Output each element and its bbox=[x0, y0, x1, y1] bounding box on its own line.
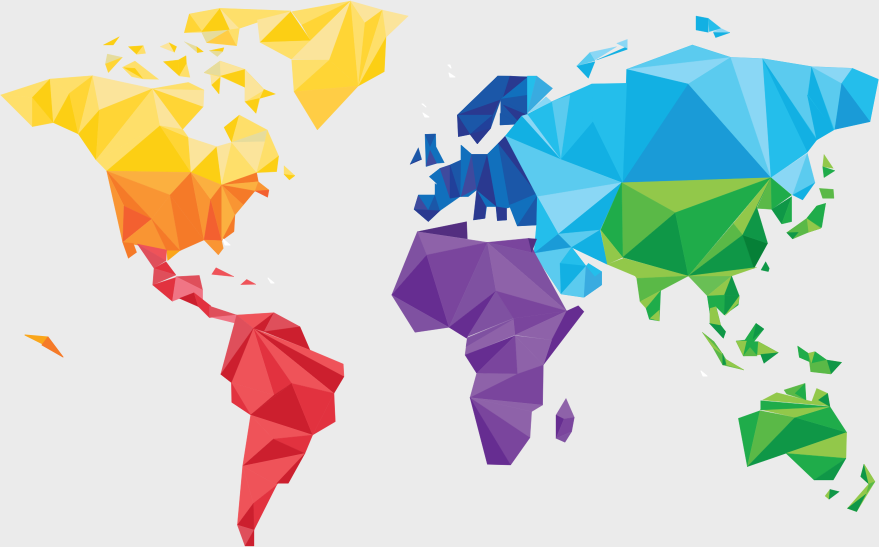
Arctic islands of Canada bbox=[103, 8, 295, 180]
Southern Asia (green) bbox=[601, 154, 835, 277]
Europe bbox=[410, 76, 553, 226]
Australia and New Zealand bbox=[738, 383, 875, 512]
Northern Asia (blue) bbox=[505, 16, 878, 297]
North America: Canada and Alaska (yellow) bbox=[1, 76, 279, 185]
South America bbox=[221, 313, 344, 546]
North America: USA and Mexico (orange) bbox=[107, 171, 269, 261]
Greenland bbox=[257, 1, 408, 130]
Hawaii island bbox=[25, 335, 63, 357]
Central America bbox=[137, 244, 256, 323]
small white islands bbox=[223, 65, 707, 376]
India and South-East Asia bbox=[623, 258, 842, 374]
Africa bbox=[392, 222, 584, 465]
